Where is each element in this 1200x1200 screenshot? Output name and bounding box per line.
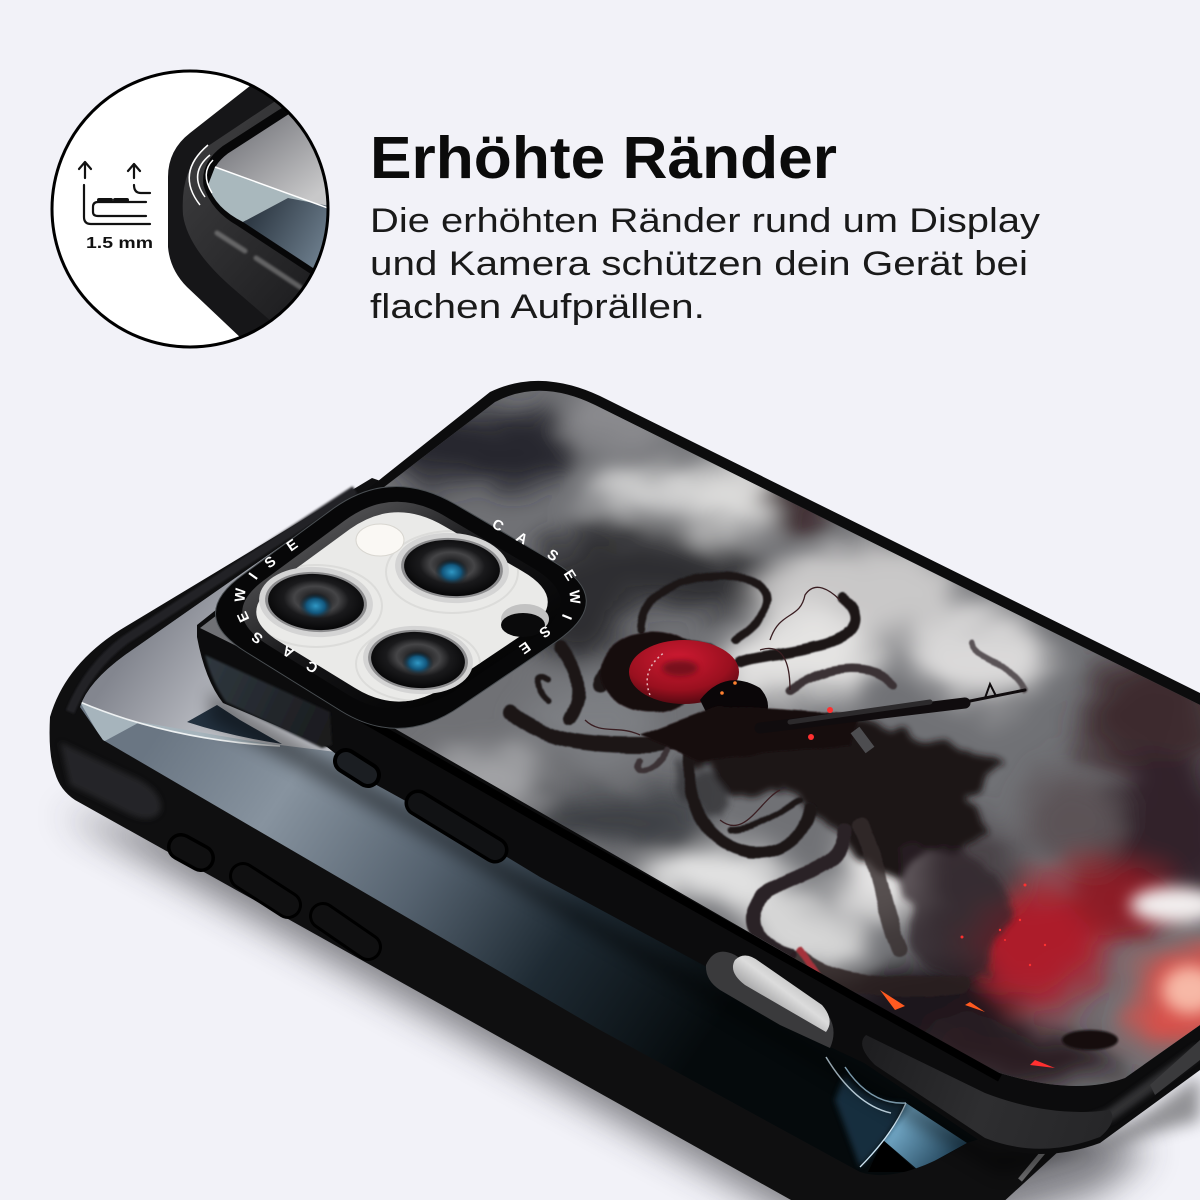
body text: flachen Aufprällen. bbox=[370, 288, 705, 326]
brand ring text: S bbox=[536, 622, 553, 641]
clouds bbox=[370, 400, 1200, 1090]
upper phone shadow bbox=[210, 690, 1200, 1175]
brand ring text: I bbox=[558, 612, 574, 621]
upper phone bumper pill near camera bbox=[205, 655, 332, 748]
lower phone screen bbox=[80, 539, 969, 1175]
brand ring text: E bbox=[560, 567, 579, 584]
brand ring text: E bbox=[284, 536, 301, 555]
creature tentacles bbox=[511, 576, 1025, 987]
microphone hole bbox=[501, 604, 549, 637]
brand ring text: W bbox=[232, 587, 250, 603]
brand ring text: E bbox=[516, 638, 533, 657]
camera bump bbox=[215, 486, 586, 728]
upper phone case bbox=[197, 381, 1200, 1154]
brand ring text: A bbox=[280, 641, 297, 661]
lens: left bbox=[257, 563, 375, 641]
body text bbox=[370, 202, 1040, 326]
heading: Erhöhte Ränder bbox=[370, 125, 837, 191]
inset circle: raised edge close-up bbox=[51, 70, 345, 348]
brand ring text: I bbox=[246, 570, 262, 583]
camera inner recessed ring bbox=[242, 502, 561, 709]
charging port bbox=[706, 952, 834, 1048]
lower screen wallpaper blue light streaks bbox=[826, 1057, 967, 1172]
brand ring text bbox=[232, 516, 583, 676]
brand ring text: C bbox=[489, 516, 506, 536]
red moon bbox=[600, 632, 739, 712]
inset screen bbox=[203, 108, 326, 274]
drop shadows bbox=[60, 812, 1150, 1200]
red sparks and eyes bbox=[720, 681, 1055, 1068]
lower phone highlight rim bbox=[70, 490, 355, 712]
flash bbox=[356, 524, 404, 556]
inset white impact arcs bbox=[189, 145, 213, 205]
camera white plate bbox=[256, 512, 548, 702]
lower phone bumper pill bbox=[60, 742, 161, 818]
upper phone right bumper pill bbox=[1150, 1040, 1200, 1095]
upper phone bbox=[190, 370, 1200, 1175]
body text: und Kamera schützen dein Gerät bei bbox=[370, 245, 1028, 283]
inset highlights bbox=[217, 233, 300, 287]
brand ring text: A bbox=[513, 529, 530, 549]
brand ring text: S bbox=[544, 546, 561, 565]
camera plate circular reflections bbox=[250, 531, 518, 701]
figure hood bbox=[640, 680, 860, 760]
icon: raised edge diagram bbox=[79, 162, 150, 224]
lower phone bbox=[50, 478, 1056, 1200]
body text: Die erhöhten Ränder rund um Display bbox=[370, 202, 1040, 240]
brand ring text: E bbox=[234, 609, 253, 624]
lens: top right bbox=[393, 529, 511, 607]
brand ring text: S bbox=[249, 628, 266, 647]
inset phone side band bbox=[182, 102, 310, 320]
creature smoke body bbox=[680, 715, 1010, 980]
upper phone buttons bbox=[346, 761, 495, 850]
lower phone buttons bbox=[181, 847, 368, 947]
upper phone side band shade bbox=[330, 700, 1000, 1078]
brand ring text: C bbox=[304, 656, 321, 676]
upper phone bottom corner gloss bbox=[985, 1050, 1200, 1128]
lower phone case bbox=[50, 478, 1060, 1200]
thin hair strands bbox=[585, 587, 840, 826]
label: 1.5 mm: 1.5 mm bbox=[86, 235, 153, 252]
upper phone bumper pill near port bbox=[862, 1035, 1112, 1149]
brand ring text: S bbox=[262, 553, 280, 572]
lens: bottom bbox=[361, 622, 475, 698]
brand ring text: W bbox=[565, 590, 583, 605]
lower phone bottom speaker edge bbox=[1020, 1150, 1045, 1180]
artwork on upper phone screen bbox=[190, 370, 1200, 1100]
inset phone corner body bbox=[168, 86, 274, 336]
rifle bbox=[760, 684, 1025, 750]
camera bump black frame bbox=[215, 486, 586, 728]
